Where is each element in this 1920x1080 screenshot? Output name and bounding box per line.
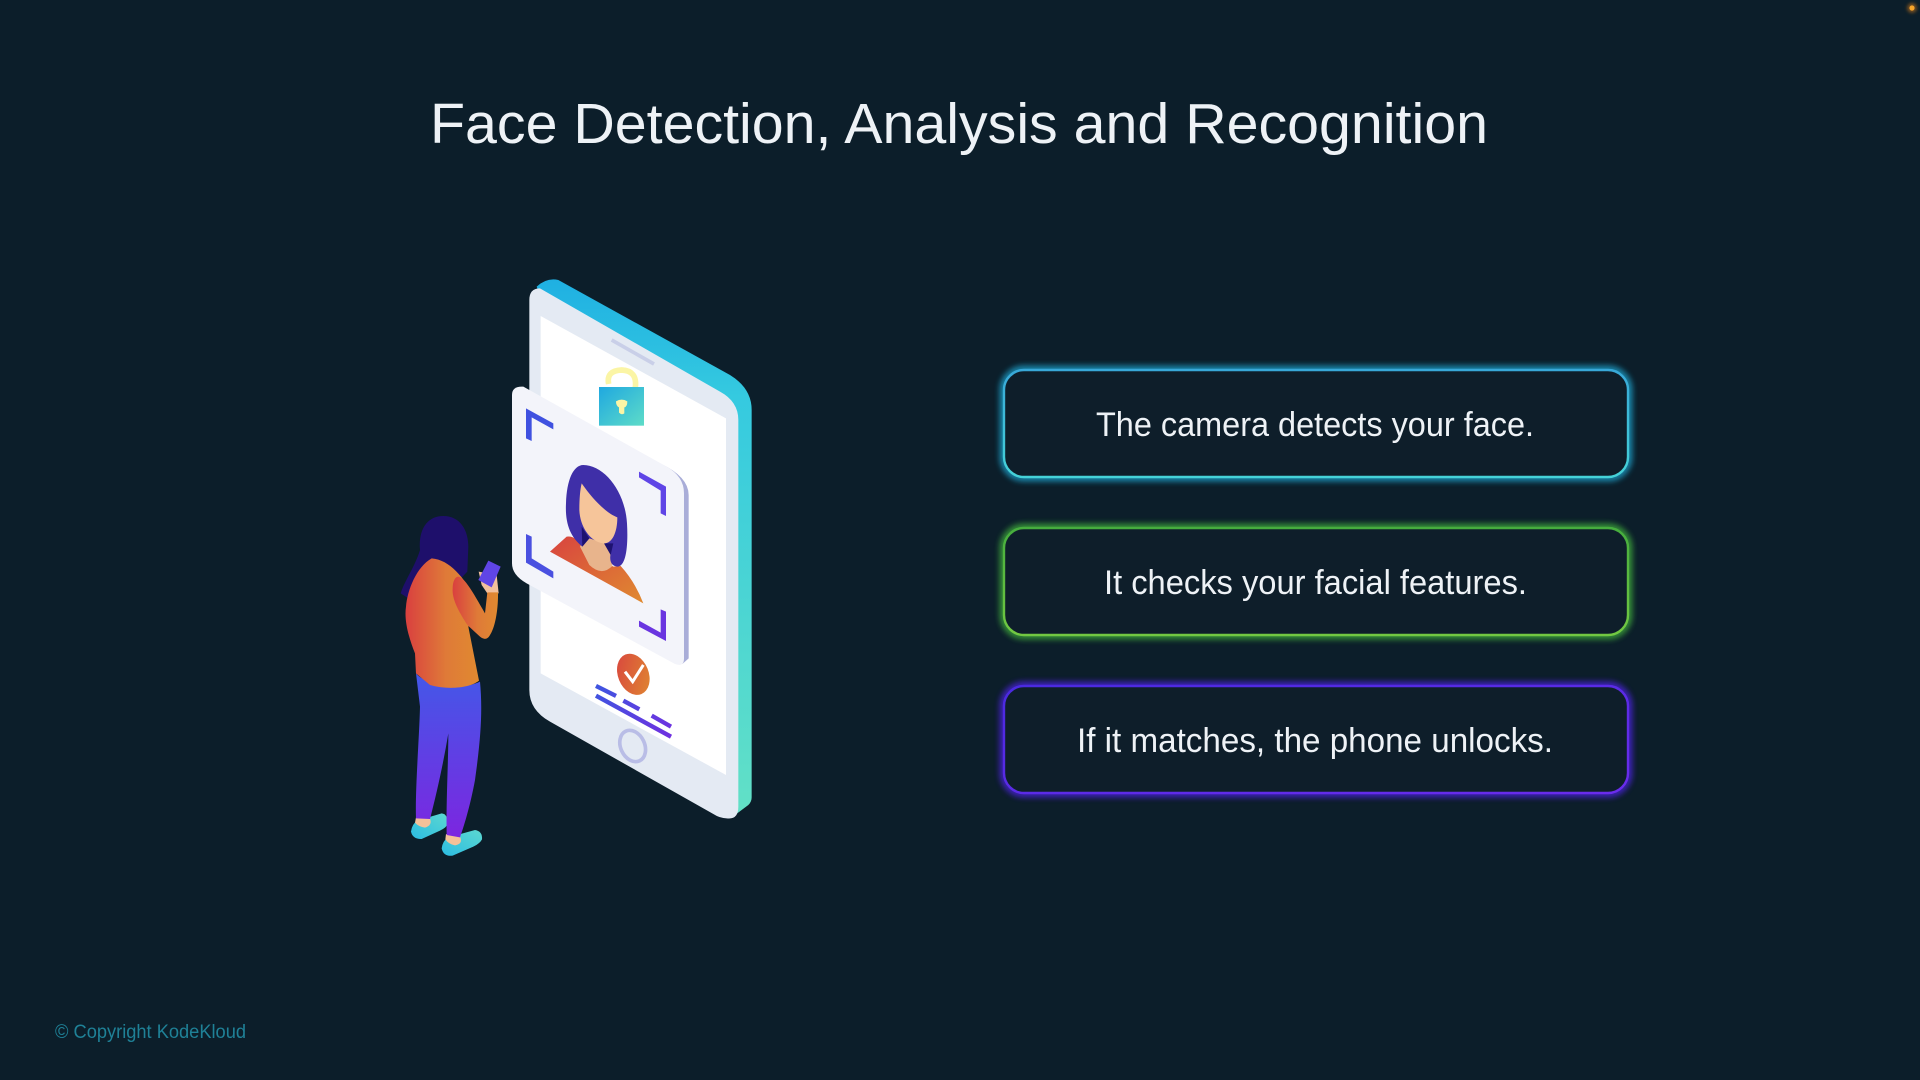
orange status dot xyxy=(1907,3,1917,13)
text lines xyxy=(596,686,671,737)
portrait xyxy=(550,465,643,603)
card face xyxy=(512,387,684,665)
jacket xyxy=(406,558,479,688)
panel: step 2 xyxy=(1004,528,1628,635)
illustration: person with phone xyxy=(401,279,752,856)
phone xyxy=(529,279,752,819)
box xyxy=(1004,528,1628,635)
neck xyxy=(580,533,612,571)
title: Face Detection, Analysis and Recognition xyxy=(430,92,1488,156)
scan corners xyxy=(526,408,666,641)
hair xyxy=(401,516,468,598)
shoes xyxy=(411,813,482,856)
card side edge xyxy=(660,463,689,664)
box xyxy=(1004,686,1628,793)
held phone xyxy=(478,561,501,587)
face scan card xyxy=(512,387,689,665)
text: If it matches, the phone unlocks. xyxy=(1077,722,1553,760)
hair xyxy=(566,465,627,567)
person xyxy=(401,516,501,856)
panel: step 3 xyxy=(1004,686,1628,793)
text: The camera detects your face. xyxy=(1096,406,1534,444)
pants xyxy=(416,673,481,837)
phone screen xyxy=(541,316,726,775)
hair shadow xyxy=(582,527,613,555)
box xyxy=(1004,370,1628,477)
arm xyxy=(453,577,498,639)
icon: padlock xyxy=(599,370,644,426)
phone side edge xyxy=(537,279,752,815)
phone front xyxy=(529,288,738,819)
copyright: © Copyright KodeKloud xyxy=(55,1022,246,1043)
shirt xyxy=(550,536,643,603)
hand xyxy=(479,572,499,593)
icon: home button xyxy=(615,726,650,766)
face xyxy=(579,483,617,543)
speaker xyxy=(612,340,654,364)
ankles xyxy=(415,817,461,845)
panel: step 1 xyxy=(1004,370,1628,477)
text: It checks your facial features. xyxy=(1104,564,1527,602)
icon: check badge xyxy=(611,649,656,700)
